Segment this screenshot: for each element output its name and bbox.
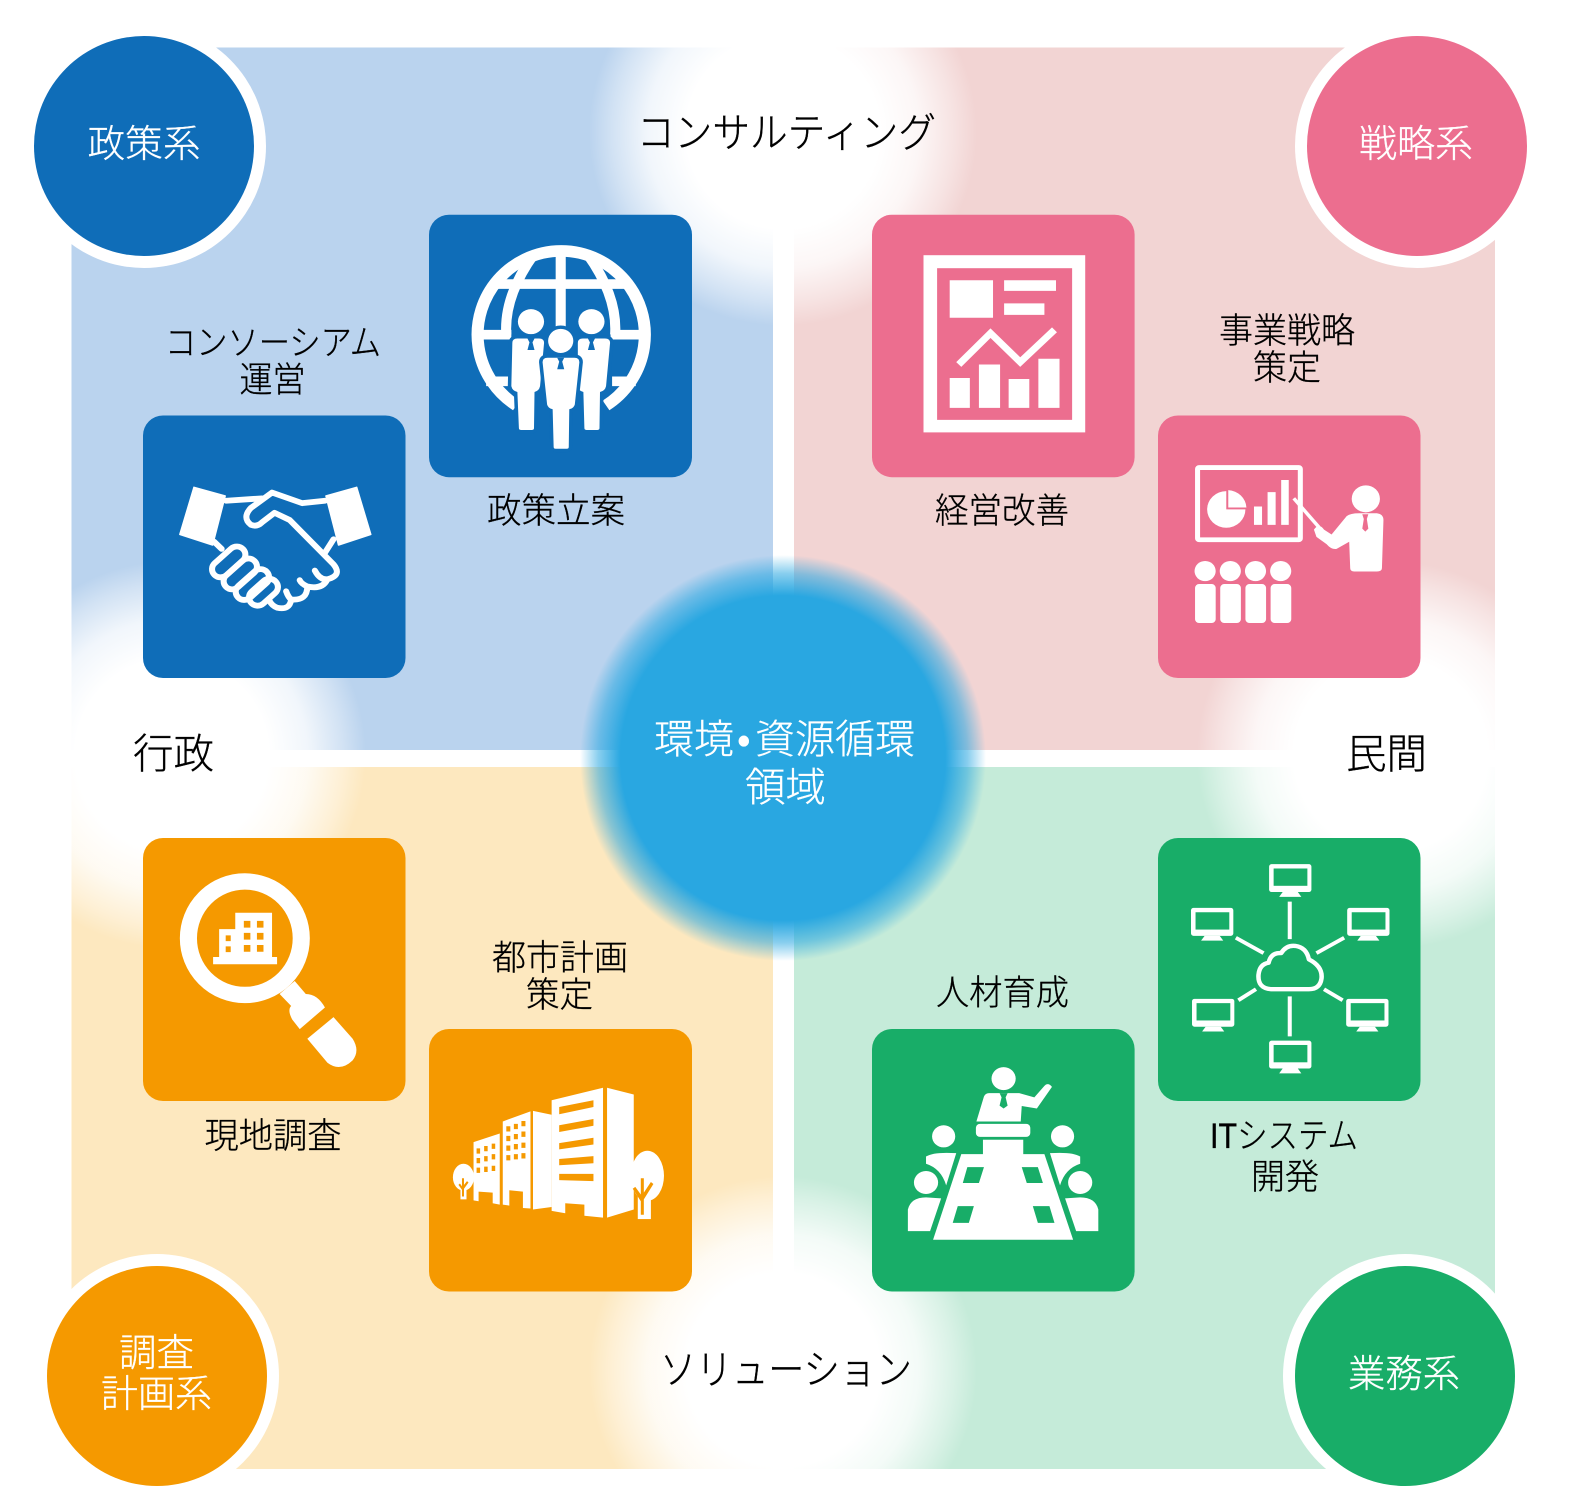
icon: magnifying glass over building (188, 881, 356, 1067)
label: consortium management: コンソーシアム (165, 324, 381, 363)
corner circle: operations: 業務系 (1348, 1354, 1460, 1396)
card: field survey (143, 838, 406, 1101)
label: business strategy formulation (1219, 312, 1355, 388)
card: policy planning (429, 215, 692, 477)
card: business strategy formulation (1158, 416, 1420, 678)
label: business strategy formulation: 策定 (1253, 349, 1321, 388)
corner cut: top left (70, 46, 100, 76)
corner circle: strategy (1295, 24, 1539, 268)
center circle: environment and resource circulation (580, 555, 986, 961)
panel: operations quadrant background (794, 767, 1495, 1469)
label: urban planning formulation (492, 939, 628, 1015)
corner cut: top right (1465, 46, 1497, 76)
icon: cloud network with six computers (1191, 864, 1389, 1073)
corner circle: operations (1283, 1254, 1527, 1498)
card: management improvement (872, 215, 1135, 477)
label: consortium management (165, 324, 381, 400)
corner circle: survey and planning: 計画系 (101, 1374, 212, 1416)
axis label: solutions: ソリューション (660, 1347, 912, 1393)
corner cut: bottom left (70, 1440, 102, 1470)
white glow: right axis (1197, 561, 1580, 949)
label: IT system development: 開発 (1251, 1158, 1319, 1197)
corner circle: survey and planning: 調査 (119, 1333, 194, 1375)
corner circle: survey and planning (35, 1254, 279, 1498)
white glow: top axis (589, 0, 977, 326)
card: human resource development (872, 1029, 1135, 1292)
card: consortium management (143, 416, 406, 678)
corner circle: strategy: 戦略系 (1359, 124, 1473, 166)
axis label: government: 行政 (133, 731, 214, 777)
center circle: environment and resource circulation: ・ (737, 718, 751, 762)
icon: speaker at meeting table (908, 1067, 1098, 1240)
corner cut: bottom right (1465, 1440, 1497, 1470)
label: policy planning: 政策立案 (487, 492, 625, 531)
panel: policy quadrant background (72, 48, 773, 750)
label: consortium management: 運営 (240, 361, 306, 400)
panel: strategy quadrant background (794, 48, 1495, 750)
corner circle: policy (22, 24, 266, 268)
icon: presenter with audience (1195, 468, 1383, 623)
center circle: environment and resource circulation: 環境 (654, 718, 734, 762)
icon: city buildings and trees (453, 1088, 664, 1219)
label: urban planning formulation: 都市計画 (492, 939, 628, 978)
label: management improvement: 経営改善 (935, 492, 1069, 531)
center circle: environment and resource circulation: 資源循環 (755, 718, 915, 762)
panel: survey and planning quadrant background (72, 767, 773, 1469)
label: human resource development: 人材育成 (936, 974, 1069, 1013)
center circle: environment and resource circulation: 領域 (745, 766, 826, 810)
label: business strategy formulation: 事業戦略 (1219, 312, 1355, 351)
label: IT system development (1210, 1117, 1358, 1197)
icon: report with charts (924, 255, 1085, 432)
card: IT system development (1158, 838, 1420, 1101)
white glow: left axis (0, 561, 366, 949)
axis label: private sector: 民間 (1346, 731, 1427, 777)
icon: handshake (180, 487, 371, 609)
white glow: bottom axis (589, 1176, 977, 1509)
label: urban planning formulation: 策定 (526, 976, 593, 1015)
card: urban planning formulation (429, 1029, 692, 1292)
icon: globe with three business people (478, 250, 645, 449)
label: field survey: 現地調査 (204, 1117, 342, 1156)
corner circle: policy: 政策系 (88, 124, 200, 166)
label: IT system development: ITシステム (1210, 1117, 1358, 1156)
axis label: consulting: コンサルティング (637, 110, 936, 156)
